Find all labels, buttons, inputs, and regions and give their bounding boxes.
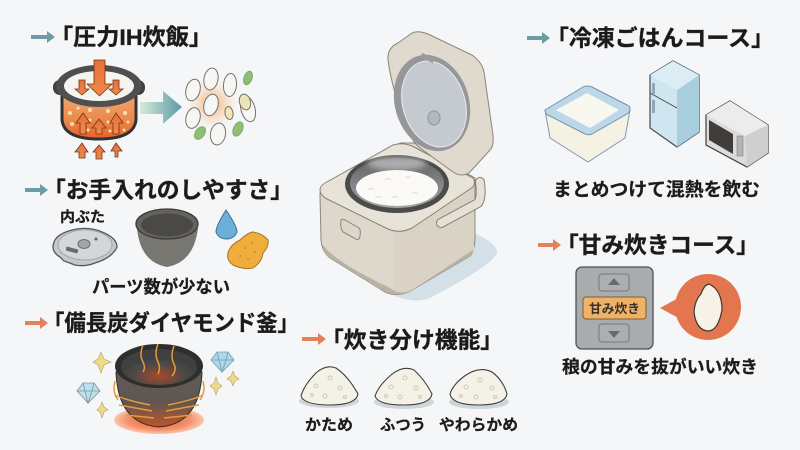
text: パーツ数が少ない: パーツ数が少ない xyxy=(92,277,230,297)
inner pot xyxy=(345,155,449,213)
button: up xyxy=(599,274,629,291)
label: やわらかめ: やわらかめ xyxy=(439,416,518,434)
icon: left diamond xyxy=(77,383,100,403)
front button xyxy=(341,219,360,240)
heading: 炊き分け機能: 「炊き分け機能」 xyxy=(321,328,503,353)
arrow: cooking flow xyxy=(140,91,182,124)
panel: control buttons xyxy=(576,267,653,349)
handle xyxy=(441,182,481,223)
illustration: pressure IH pot xyxy=(53,60,145,159)
icon: right diamond xyxy=(211,352,234,372)
cooker shadow xyxy=(395,232,497,301)
text: 稂の甘みを抜がいい炊き: 稂の甘みを抜がいい炊き xyxy=(562,357,758,377)
icon: frozen rice container xyxy=(545,86,630,162)
icon: water drop xyxy=(216,210,237,239)
icon: inner pot xyxy=(136,209,198,267)
icons: sparkles xyxy=(93,352,239,418)
icon: やわらかめ rice mound xyxy=(449,370,509,409)
heading: 冷凍ごはんコース: 「冷凍ごはんコース」 xyxy=(546,25,774,51)
icon: microwave xyxy=(706,101,768,167)
label: 内ぶた: 内ぶた xyxy=(60,209,105,226)
heading: 備長炭ダイヤモンド釜: 「備長炭ダイヤモンド釜」 xyxy=(43,310,299,336)
icon: sponge xyxy=(228,232,268,269)
cooker top xyxy=(320,144,474,231)
icon: refrigerator xyxy=(650,61,699,147)
text: まとめつけて混熱を飲む: まとめつけて混熱を飲む xyxy=(553,179,760,200)
illustration: rice cooker xyxy=(320,32,497,301)
label: ふつう: ふつう xyxy=(380,416,426,434)
icon: かため rice mound xyxy=(299,367,359,408)
illustration: binchotan diamond pot xyxy=(114,344,204,434)
heading: 圧力IH炊飯: 「圧力IH炊飯」 xyxy=(50,25,212,50)
illustration: rice grains xyxy=(183,67,258,146)
icon: inner lid xyxy=(53,228,117,266)
button: down xyxy=(599,324,629,342)
label: かため: かため xyxy=(305,416,353,434)
steam xyxy=(367,156,427,170)
callout: rice grain bubble xyxy=(660,274,741,340)
button: 甘み炊き: 甘み炊き xyxy=(589,301,640,316)
heading: お手入れのしやすさ: 「お手入れのしやすさ」 xyxy=(43,178,293,203)
lid xyxy=(388,32,493,175)
heading: 甘み炊きコース: 「甘み炊きコース」 xyxy=(556,233,759,258)
icon: ふつう rice mound xyxy=(374,368,434,409)
rice xyxy=(356,170,438,206)
cooker body xyxy=(320,143,475,295)
